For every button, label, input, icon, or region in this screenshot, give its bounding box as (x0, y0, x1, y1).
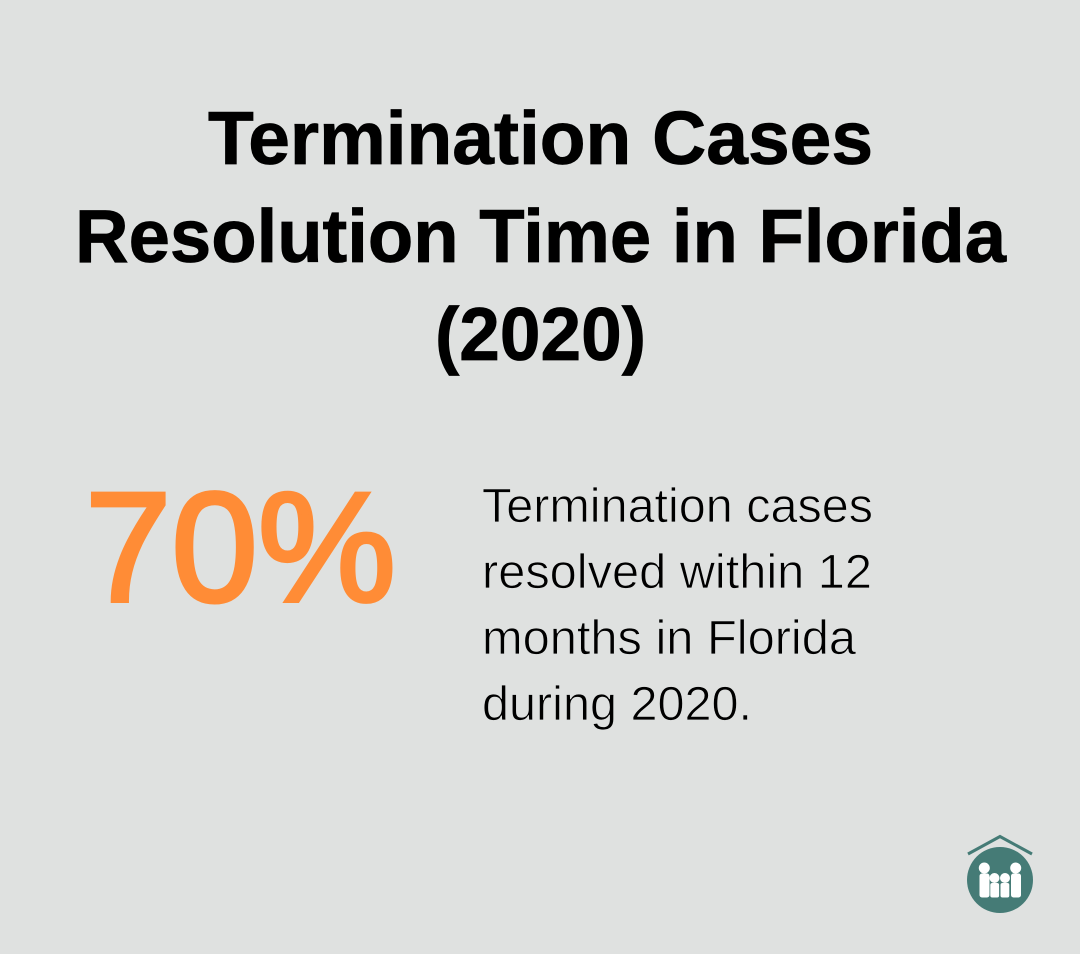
description text: resolved within 12 (482, 546, 872, 599)
title (75, 96, 1007, 376)
title: Resolution Time in Florida (75, 194, 1007, 278)
description text: months in Florida (482, 612, 856, 665)
description text (482, 480, 873, 731)
description text: during 2020. (482, 678, 752, 731)
stat: 70%: 70% (85, 461, 396, 635)
description text: Termination cases (482, 480, 873, 533)
title: Termination Cases (208, 96, 873, 180)
title: (2020) (435, 292, 646, 376)
icon: logo house with family (967, 836, 1033, 913)
